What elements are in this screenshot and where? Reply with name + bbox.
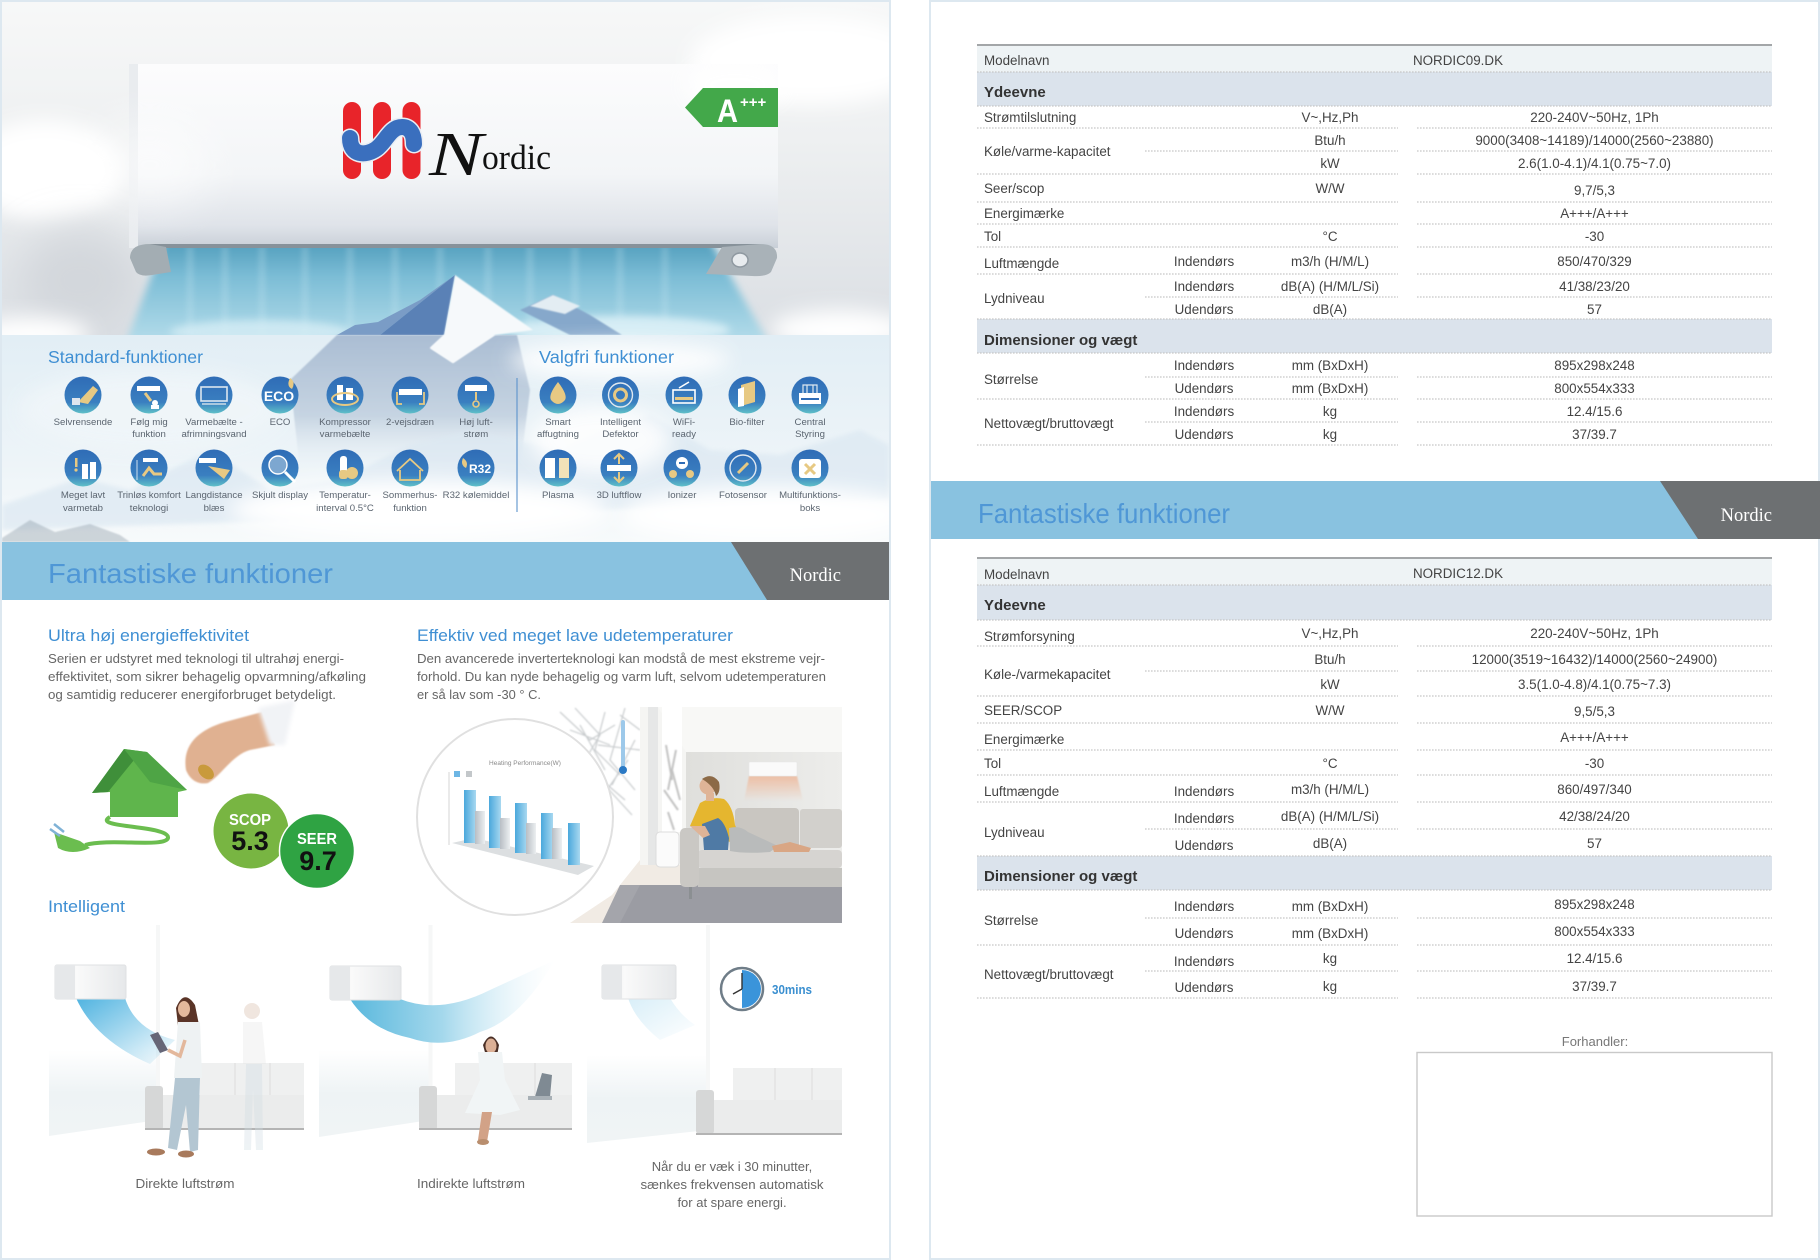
section banner: [931, 481, 1820, 539]
section banner: Fantastiske funktioner: [978, 498, 1230, 529]
icon: ionizer: Ionizer: [668, 490, 697, 501]
caption: Når du er væk i 30 minutter,: [652, 1159, 812, 1174]
heading: optional features: Valgfri funktioner: [539, 347, 674, 367]
icon: compressor heating belt: Kompressor: [319, 417, 372, 428]
icon: R32 refrigerant: [443, 450, 509, 501]
table: NORDIC09 specifications: Størrelse: [984, 372, 1038, 387]
sofa: [696, 1068, 842, 1135]
cold airflow: [126, 248, 768, 335]
section banner: [2, 542, 889, 600]
section banner: Nordic: [1721, 506, 1772, 526]
table: NORDIC12 specifications: 895x298x248: [1554, 897, 1635, 912]
table: NORDIC09 specifications: 37/39.7: [1572, 427, 1617, 442]
icon: hidden display: Skjult display: [252, 490, 308, 501]
table: NORDIC09 specifications: [977, 44, 1772, 445]
icon: bio filter: [728, 376, 766, 428]
icon: photo sensor: Fotosensor: [719, 490, 768, 501]
icon: plasma: [540, 450, 576, 501]
heading: low temperatures: Effektiv ved meget lave udetemperaturer: [417, 626, 733, 645]
icon: intelligent defrost: Defektor: [602, 429, 639, 440]
icon: holiday house function: [383, 450, 437, 514]
icon: central control: Central: [795, 417, 825, 428]
table: NORDIC09 specifications: Køle/varme-kapacitet: [984, 144, 1111, 159]
table: NORDIC12 specifications: 42/38/24/20: [1559, 809, 1630, 824]
table: NORDIC12 specifications: Energimærke: [984, 732, 1064, 747]
table: NORDIC09 specifications: 220-240V~50Hz, 1Ph: [1530, 110, 1659, 125]
table: NORDIC09 specifications: 895x298x248: [1554, 358, 1635, 373]
icon: multifunction box: [779, 450, 841, 514]
table: NORDIC09 specifications: Seer/scop: [984, 181, 1044, 196]
caption: Indirekte luftstrøm: [417, 1176, 525, 1191]
badge: SCOP 5.3: [214, 794, 288, 868]
mountain peak: [337, 275, 622, 336]
clock: [721, 968, 763, 1010]
table: NORDIC09 specifications: mm (BxDxH): [1292, 358, 1368, 373]
icon: R32 refrigerant: R32: [469, 462, 491, 476]
icon: heating belt: [181, 376, 247, 440]
caption: for at spare energi.: [677, 1195, 787, 1210]
icon: compressor heating belt: varmebælte: [320, 429, 370, 440]
energy label A+++: [685, 88, 778, 129]
table: NORDIC12 specifications: Indendørs: [1174, 811, 1234, 826]
table: NORDIC09 specifications: 850/470/329: [1557, 254, 1632, 269]
caption: [640, 1159, 824, 1210]
table: NORDIC09 specifications: kg: [1323, 427, 1337, 442]
table: NORDIC09 specifications: dB(A): [1313, 302, 1347, 317]
table: NORDIC12 specifications: A+++/A+++: [1560, 730, 1629, 745]
icon: high airflow: strøm: [464, 429, 488, 440]
text: energy efficiency: effektivitet, som sikrer behagelig opvarmning/afkøling: [48, 669, 366, 684]
icon: two-way drain: [386, 376, 434, 428]
table: NORDIC09 specifications: 41/38/23/20: [1559, 279, 1630, 294]
text: low temperatures: [417, 651, 826, 702]
icon: long distance blowing: blæs: [204, 503, 225, 514]
icon: smart dehumidification: affugtning: [537, 429, 579, 440]
icon: heating belt: afrimningsvand: [181, 429, 247, 440]
icon: follow me: [130, 376, 168, 440]
sofa: [145, 1063, 304, 1130]
table: NORDIC09 specifications: Ydeevne: [984, 84, 1046, 101]
table: NORDIC12 specifications: kg: [1323, 979, 1337, 994]
table: NORDIC12 specifications: -30: [1585, 756, 1604, 771]
left page border: [1, 1, 890, 1259]
table: NORDIC12 specifications: Indendørs: [1174, 954, 1234, 969]
icon: holiday house function: funktion: [393, 503, 427, 514]
table: NORDIC12 specifications: Nettovægt/bruttovægt: [984, 967, 1114, 982]
badge: SEER 9.7: SEER: [297, 831, 337, 848]
table: NORDIC12 specifications: V~,Hz,Ph: [1302, 626, 1358, 641]
badge: SCOP 5.3: SCOP: [229, 812, 271, 829]
AC unit: [602, 965, 676, 999]
table: NORDIC09 specifications: Nettovægt/bruttovægt: [984, 416, 1114, 431]
table: NORDIC09 specifications: NORDIC09.DK: [1413, 53, 1503, 68]
table: NORDIC09 specifications: dB(A) (H/M/L/Si): [1281, 279, 1379, 294]
airflow: [76, 998, 175, 1064]
icon: photo sensor: [719, 450, 768, 501]
table: NORDIC12 specifications: Indendørs: [1174, 784, 1234, 799]
table: NORDIC09 specifications: A+++/A+++: [1560, 206, 1629, 221]
caption: sænkes frekvensen automatisk: [640, 1177, 824, 1192]
badge: SEER 9.7: 9.7: [299, 846, 337, 876]
right page: [930, 1, 1820, 1259]
table: NORDIC12 specifications: °C: [1322, 756, 1338, 771]
table: NORDIC12 specifications: [977, 557, 1772, 998]
table: NORDIC09 specifications: Udendørs: [1175, 427, 1234, 442]
icon: temperature interval: Temperatur-: [319, 490, 371, 501]
illustration: hand with coin: [185, 700, 295, 783]
icon: ECO: ECO: [270, 417, 290, 428]
table: NORDIC09 specifications: V~,Hz,Ph: [1302, 110, 1358, 125]
table: NORDIC09 specifications: -30: [1585, 229, 1604, 244]
table: NORDIC12 specifications: Størrelse: [984, 913, 1038, 928]
AC unit: [55, 965, 126, 999]
icon: multifunction box: Multifunktions-: [779, 490, 841, 501]
table: NORDIC09 specifications: 12.4/15.6: [1567, 404, 1622, 419]
icon: plasma: Plasma: [542, 490, 575, 501]
table: NORDIC12 specifications: dB(A) (H/M/L/Si): [1281, 809, 1379, 824]
table: NORDIC09 specifications: Indendørs: [1174, 279, 1234, 294]
table: NORDIC09 specifications: Dimensioner og vægt: [984, 332, 1137, 349]
30mins label: 30mins: [772, 983, 812, 997]
table: NORDIC12 specifications: Udendørs: [1175, 926, 1234, 941]
text: energy efficiency: og samtidig reducerer energiforbruget betydeligt.: [48, 687, 336, 702]
table: NORDIC12 specifications: Luftmængde: [984, 784, 1059, 799]
hero logo: Nordic: N: [428, 121, 488, 189]
icon: temperature interval: interval 0.5°C: [316, 503, 374, 514]
section banner: Fantastiske funktioner: [48, 558, 333, 589]
text: low temperatures: Den avancerede inverterteknologi kan modstå de mest ekstreme vejr-: [417, 651, 825, 666]
left page: [0, 2, 930, 1258]
table: NORDIC12 specifications: kW: [1320, 677, 1340, 692]
table: NORDIC12 specifications: 800x554x333: [1554, 924, 1635, 939]
section banner: Nordic: [790, 566, 841, 586]
icon: central control: [792, 376, 828, 440]
table: NORDIC09 specifications: 2.6(1.0-4.1)/4.1(0.75~7.0): [1518, 156, 1671, 171]
icon: 3D airflow: [597, 450, 641, 501]
table: NORDIC09 specifications: Energimærke: [984, 206, 1064, 221]
table: NORDIC09 specifications: Indendørs: [1174, 254, 1234, 269]
icon: heating belt: Varmebælte -: [185, 417, 243, 428]
table: NORDIC12 specifications: 12000(3519~16432)/14000(2560~24900): [1472, 652, 1717, 667]
air conditioner with warm air: [744, 762, 803, 801]
hero: air conditioner over clouds: [2, 4, 889, 335]
mountain snow face: [430, 334, 494, 364]
caption: Direkte luftstrøm: [136, 1176, 234, 1191]
air conditioner body: [90, 60, 785, 248]
icon: follow me: funktion: [132, 429, 166, 440]
table: NORDIC09 specifications: Udendørs: [1175, 302, 1234, 317]
airflow: [628, 998, 695, 1040]
icon: long distance blowing: [185, 450, 243, 514]
photo: woman on sofa with heating chart: [417, 707, 842, 923]
table: NORDIC12 specifications: Btu/h: [1314, 652, 1346, 667]
table: NORDIC12 specifications: Lydniveau: [984, 825, 1045, 840]
table: NORDIC12 specifications: NORDIC12.DK: [1413, 566, 1503, 581]
icon: temperature interval: [316, 450, 374, 514]
table: NORDIC09 specifications: 9000(3408~14189)/14000(2560~23880): [1475, 133, 1714, 148]
icon: multifunction box: boks: [800, 503, 820, 514]
table: NORDIC12 specifications: 9,5/5,3: [1574, 704, 1615, 719]
icon: very low heat loss: [61, 450, 105, 514]
icon: stepless comfort: [117, 450, 181, 514]
dealer box: [1417, 1034, 1772, 1216]
table: NORDIC09 specifications: Modelnavn: [984, 53, 1050, 68]
heading: energy efficiency: Ultra høj energieffektivitet: [48, 626, 249, 645]
table: NORDIC12 specifications: Tol: [984, 756, 1001, 771]
table: NORDIC12 specifications: 37/39.7: [1572, 979, 1617, 994]
table: NORDIC09 specifications: 9,7/5,3: [1574, 183, 1615, 198]
table: NORDIC12 specifications: dB(A): [1313, 836, 1347, 851]
dealer box: Forhandler:: [1562, 1034, 1628, 1049]
table: NORDIC12 specifications: kg: [1323, 951, 1337, 966]
icon: intelligent defrost: Intelligent: [600, 417, 641, 428]
icon: ECO: [262, 376, 298, 428]
icon: ECO: ECO: [264, 388, 294, 404]
hero logo: Nordic: [340, 102, 550, 179]
table: NORDIC09 specifications: Btu/h: [1314, 133, 1346, 148]
icon: high airflow: Høj luft-: [459, 417, 493, 428]
icon: wifi ready: [666, 376, 702, 440]
heading: intelligent: Intelligent: [48, 897, 125, 916]
chart: heating performance: Heating Performance(W): [489, 760, 561, 767]
woman with tablet: [147, 997, 202, 1158]
table: NORDIC12 specifications: 3.5(1.0-4.8)/4.1(0.75~7.3): [1518, 677, 1671, 692]
table: NORDIC12 specifications: mm (BxDxH): [1292, 899, 1368, 914]
table: NORDIC12 specifications: 860/497/340: [1557, 782, 1632, 797]
table: NORDIC09 specifications: 800x554x333: [1554, 381, 1635, 396]
icon: compressor heating belt: [319, 376, 372, 440]
icon: wifi ready: WiFi-: [673, 417, 695, 428]
table: NORDIC12 specifications: 57: [1587, 836, 1602, 851]
air conditioner lower lip: [130, 244, 777, 276]
icon: holiday house function: Sommerhus-: [383, 490, 437, 501]
table: NORDIC12 specifications: 220-240V~50Hz, 1Ph: [1530, 626, 1659, 641]
text: low temperatures: er så lav som -30 ° C.: [417, 687, 541, 702]
airflow: [350, 960, 555, 1043]
table: NORDIC12 specifications: Udendørs: [1175, 980, 1234, 995]
table: NORDIC09 specifications: Indendørs: [1174, 358, 1234, 373]
icon: bio filter: Bio-filter: [729, 417, 765, 428]
sofa: [419, 1063, 572, 1130]
panel: direct airflow: [49, 925, 304, 1191]
table: NORDIC12 specifications: Køle-/varmekapacitet: [984, 667, 1111, 682]
table: NORDIC09 specifications: Udendørs: [1175, 381, 1234, 396]
illustration: green house with plug: [50, 749, 187, 852]
panel: features over snowy mountains: [2, 275, 920, 543]
text: energy efficiency: Serien er udstyret med teknologi til ultrahøj energi-: [48, 651, 344, 666]
chart: heating performance: [417, 719, 613, 915]
woman: [690, 776, 811, 853]
ghost woman: [243, 1003, 266, 1150]
table: NORDIC12 specifications: Dimensioner og vægt: [984, 868, 1137, 885]
icon: smart dehumidification: [537, 376, 579, 440]
hero logo: Nordic: ordic: [482, 138, 551, 177]
woman with laptop: [465, 1036, 552, 1145]
icon: long distance blowing: Langdistance: [185, 490, 243, 501]
table: NORDIC09 specifications: W/W: [1316, 181, 1345, 196]
icon: high airflow: [458, 376, 494, 440]
sofa: [680, 808, 842, 899]
AC unit: [330, 966, 401, 1000]
table: NORDIC12 specifications: Strømforsyning: [984, 629, 1075, 644]
energy label A+++: +++: [740, 94, 767, 111]
table: NORDIC12 specifications: SEER/SCOP: [984, 703, 1062, 718]
icon: stepless comfort: Trinløs komfort: [117, 490, 181, 501]
table: NORDIC09 specifications: m3/h (H/M/L): [1291, 254, 1369, 269]
icon: hidden display: [252, 450, 308, 501]
badge: SEER 9.7: [280, 814, 354, 888]
badge: SCOP 5.3: 5.3: [231, 826, 269, 856]
panel: indirect airflow: [319, 925, 572, 1191]
icon: R32 refrigerant: R32 kølemiddel: [443, 490, 509, 501]
table: NORDIC12 specifications: mm (BxDxH): [1292, 926, 1368, 941]
table: NORDIC09 specifications: °C: [1322, 229, 1338, 244]
table: NORDIC09 specifications: Lydniveau: [984, 291, 1045, 306]
table: NORDIC09 specifications: kW: [1320, 156, 1340, 171]
table: NORDIC09 specifications: 57: [1587, 302, 1602, 317]
icon: two-way drain: 2-vejsdræn: [386, 417, 434, 428]
icon: 3D airflow: 3D luftflow: [597, 490, 641, 501]
icon: self-cleaning: Selvrensende: [54, 417, 112, 428]
table: NORDIC12 specifications: Udendørs: [1175, 838, 1234, 853]
text: energy efficiency: [48, 651, 366, 702]
icon: very low heat loss: Meget lavt: [61, 490, 105, 501]
table: NORDIC09 specifications: Indendørs: [1174, 404, 1234, 419]
icon: central control: Styring: [795, 429, 825, 440]
text: low temperatures: forhold. Du kan nyde behagelig og varm luft, selvom udetemperaturen: [417, 669, 826, 684]
table: NORDIC12 specifications: 12.4/15.6: [1567, 951, 1622, 966]
thermometer: [619, 720, 627, 774]
icon: intelligent defrost: [600, 376, 641, 440]
panel: 30-minute away mode: [587, 925, 842, 1210]
table: NORDIC12 specifications: W/W: [1316, 703, 1345, 718]
icon: wifi ready: ready: [672, 429, 696, 440]
divider between feature groups: [516, 378, 518, 512]
table: NORDIC12 specifications: Indendørs: [1174, 899, 1234, 914]
table: NORDIC09 specifications: Tol: [984, 229, 1001, 244]
icon: self-cleaning: [54, 376, 112, 428]
table: NORDIC12 specifications: Modelnavn: [984, 567, 1050, 582]
table: NORDIC12 specifications: m3/h (H/M/L): [1291, 782, 1369, 797]
table: NORDIC09 specifications: Strømtilslutning: [984, 110, 1076, 125]
table: NORDIC09 specifications: Luftmængde: [984, 256, 1059, 271]
icon: very low heat loss: varmetab: [63, 503, 103, 514]
icon: ionizer: [664, 450, 700, 501]
heading: standard features: Standard-funktioner: [48, 347, 203, 367]
icon: smart dehumidification: Smart: [545, 417, 571, 428]
table: NORDIC09 specifications: mm (BxDxH): [1292, 381, 1368, 396]
table: NORDIC12 specifications: Ydeevne: [984, 597, 1046, 614]
icon: follow me: Følg mig: [130, 417, 168, 428]
energy label A+++: A: [717, 93, 738, 129]
table: NORDIC09 specifications: kg: [1323, 404, 1337, 419]
icon: stepless comfort: teknologi: [130, 503, 168, 514]
